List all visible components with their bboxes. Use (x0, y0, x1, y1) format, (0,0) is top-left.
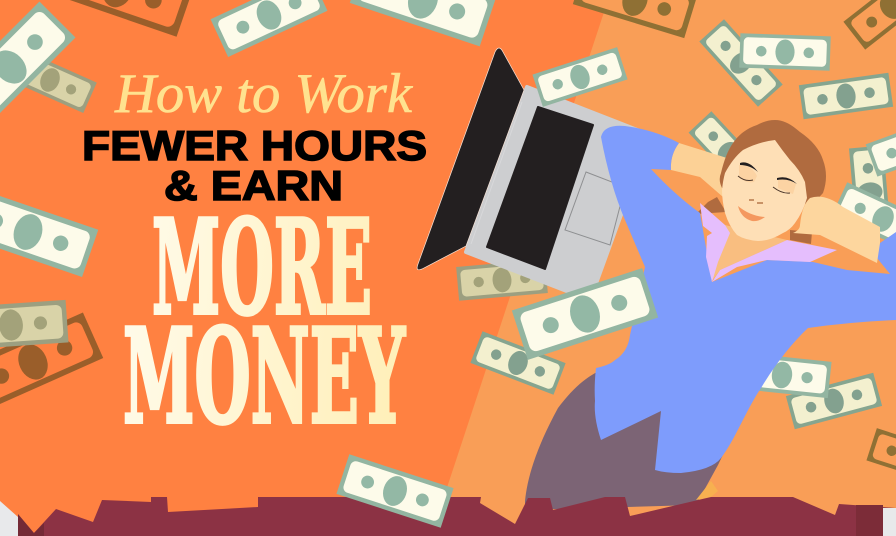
bill: behind the head (689, 111, 767, 193)
bill: brown outline lower left (0, 312, 103, 412)
left forearm and hand (671, 143, 727, 197)
hair (720, 120, 826, 205)
bill: brown outline top right corner (843, 0, 896, 50)
closed eye left (738, 176, 753, 180)
bill: olive upper left (3, 47, 97, 113)
collar left lapel (700, 203, 730, 282)
trousers (525, 372, 730, 510)
laptop screen (417, 48, 524, 270)
laptop keyboard (487, 107, 593, 269)
title line: and Earn: & EARN (164, 162, 343, 209)
bill: tilted behind upper right (699, 19, 783, 107)
title block (82, 63, 427, 453)
bill: lower centre tilted (470, 331, 566, 395)
neck (712, 225, 787, 281)
collar right lapel (712, 240, 837, 282)
bill: top edge (350, 0, 496, 46)
smile (738, 206, 765, 221)
bill: left middle (0, 187, 98, 277)
dark maroon fold right (856, 505, 883, 536)
laptop (417, 48, 650, 300)
blouse body and arms (595, 126, 896, 473)
bill: lower right front (732, 352, 832, 398)
bill: bottom centre (336, 454, 454, 528)
bill: large centre over laptop and sleeve (512, 268, 658, 360)
bill: top centre (211, 0, 327, 57)
left eyebrow (740, 162, 758, 172)
title block: MONEY (123, 300, 406, 453)
closed eye right (773, 187, 790, 193)
bill: lower right back (786, 373, 882, 429)
laptop base (466, 87, 650, 300)
dark maroon fold left (18, 514, 44, 536)
bill: brown outline top right of centre (573, 0, 697, 38)
bill: right of head vertical (849, 145, 891, 239)
bill: upper right flat (739, 33, 831, 71)
bill: right edge upper (866, 113, 896, 177)
bill: on laptop top edge (532, 47, 628, 107)
sliver of yellow by the knee (696, 481, 718, 500)
title line: Fewer Hours: FEWER HOURS (82, 122, 427, 169)
bill: upper left large (0, 2, 75, 132)
title line: How to Work: How to Work (114, 63, 413, 125)
background: light orange diagonal panel (431, 0, 896, 536)
grey page corner left (0, 501, 18, 536)
bill: olive under laptop (456, 259, 548, 301)
hair behind neck (696, 197, 812, 244)
bill: brown outline top (42, 0, 194, 37)
laptop hinge line (471, 102, 522, 244)
bill: right edge lower (832, 182, 896, 256)
nose shading and eyelids (739, 165, 796, 194)
bill: brown outline lower right (866, 428, 896, 488)
bill: olive lower left (0, 300, 69, 350)
torn maroon band at bottom (18, 497, 896, 536)
title block: MORE (152, 191, 372, 344)
nose (749, 200, 763, 203)
woman relaxing (525, 120, 896, 510)
right forearm and hand (793, 197, 880, 263)
bill: upper right low (799, 73, 893, 119)
laptop trackpad (565, 172, 625, 245)
face (722, 140, 807, 241)
right eyebrow (777, 177, 797, 184)
grey page corner right (883, 508, 896, 536)
